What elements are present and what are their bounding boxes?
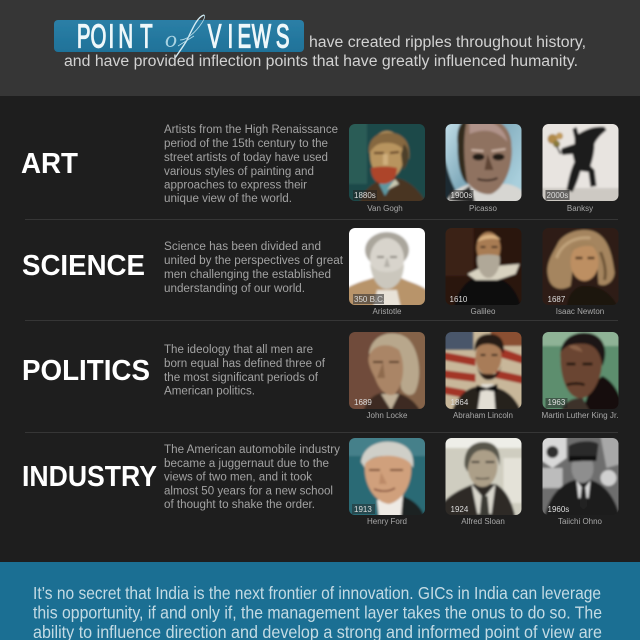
caption: Henry Ford: Henry Ford	[367, 517, 407, 526]
text block: Politics: born equal has defined three of	[164, 358, 326, 370]
portrait: Picasso: 1900s	[450, 191, 472, 200]
title banner: Point of Views: VIEWS	[208, 17, 290, 55]
header sentence: have created ripples throughout history,	[309, 34, 586, 51]
portrait: Henry Ford: 1913	[354, 505, 372, 514]
portrait: Van Gogh: 1880s	[354, 191, 376, 200]
text block: Industry: became a juggernaut due to the	[164, 458, 329, 470]
date tag	[352, 504, 375, 514]
text block: Art: period of the 15th century to the	[164, 138, 328, 150]
main dark panel	[0, 96, 640, 562]
text block: Industry: views of two men, and it took	[164, 472, 312, 484]
caption: John Locke: John Locke	[367, 411, 408, 420]
heading: Politics: POLITICS	[22, 355, 150, 387]
panel: closing statement	[0, 562, 640, 640]
portrait: Martin Luther King Jr.: 1963	[548, 398, 566, 407]
text block: Art: street artists of today have used	[164, 152, 328, 164]
portrait: Taiichi Ohno	[542, 438, 618, 514]
caption: Galileo: Galileo	[471, 307, 496, 316]
date tag: 1864	[450, 398, 469, 407]
row: Politics	[22, 344, 326, 398]
caption: Isaac Newton: Isaac Newton	[556, 307, 604, 316]
row: Art	[21, 124, 338, 205]
portrait: Picasso	[446, 124, 522, 201]
text block: Science: united by the perspectives of great	[164, 255, 344, 267]
portrait: Martin Luther King Jr.	[542, 332, 618, 409]
date tag: 1610	[450, 295, 468, 304]
portrait: Galileo	[446, 228, 522, 305]
text block: Industry: The American automobile industry	[164, 444, 340, 456]
portrait: Henry Ford	[349, 438, 425, 515]
portrait: Aristotle: 350 B.C.	[354, 295, 385, 304]
portrait: Van Gogh	[349, 124, 425, 201]
text block: Science: understanding of our world.	[164, 283, 305, 295]
caption: Taiichi Ohno: Taiichi Ohno	[558, 517, 603, 526]
row dividers	[25, 220, 618, 432]
date tag: 1960s	[548, 505, 569, 514]
date tag	[546, 398, 568, 408]
heading: Industry: INDUSTRY	[22, 461, 157, 493]
date tag: 1687	[548, 295, 566, 304]
title banner: Point of Views: o	[165, 27, 177, 53]
heading: Science: SCIENCE	[22, 250, 145, 282]
text block: Industry: of thought to shake the order.	[164, 499, 315, 511]
header sentence: and have provided inflection points that have greatly influenced humanity.	[64, 53, 578, 70]
title banner: Point of Views: POINT	[77, 17, 153, 55]
text block: Science: Science has been divided and	[164, 241, 321, 253]
closing text	[33, 583, 602, 640]
date tag: 1924	[450, 505, 469, 514]
text block: Science: men challenging the established	[164, 269, 331, 281]
text block: Industry: almost 50 years for a new school	[164, 486, 333, 498]
portrait: Isaac Newton	[542, 228, 618, 305]
row: Science	[22, 241, 344, 295]
text block: Politics: the most significant periods of	[164, 372, 319, 384]
caption: Aristotle: Aristotle	[373, 307, 402, 316]
caption: Banksy: Banksy	[567, 204, 593, 213]
title banner: Point of Views	[54, 15, 304, 58]
portrait: Banksy	[540, 122, 620, 203]
portrait: Aristotle	[349, 228, 425, 305]
row: Industry	[22, 444, 340, 511]
portrait: Abraham Lincoln	[446, 332, 522, 409]
caption: Alfred Sloan: Alfred Sloan	[461, 517, 505, 526]
header sentence	[64, 34, 586, 70]
date tag: 1689	[354, 398, 372, 407]
text block: Art: Artists from the High Renaissance	[164, 124, 338, 136]
text block: Politics	[164, 344, 326, 398]
heading: Art: ART	[21, 148, 79, 180]
date tag	[353, 190, 377, 200]
caption: Martin Luther King Jr.: Martin Luther King Jr.	[542, 411, 618, 420]
text block: Art: approaches to express their	[164, 180, 307, 192]
text block: Art	[164, 124, 338, 205]
portrait: Banksy: 2000s	[546, 191, 568, 200]
text block: Science	[164, 241, 344, 295]
text block: Art: unique view of the world.	[164, 193, 292, 205]
text block: Art: various styles of painting and	[164, 166, 314, 178]
text block: Politics: American politics.	[164, 386, 255, 398]
date tag	[546, 190, 570, 200]
date tag	[353, 294, 384, 304]
closing text: this opportunity, if and only if, the management layer takes the onus to do so. The	[33, 602, 602, 622]
text block: Industry	[164, 444, 340, 511]
caption: Abraham Lincoln: Abraham Lincoln	[453, 411, 513, 420]
caption: Picasso: Picasso	[469, 204, 498, 213]
caption: Van Gogh: Van Gogh	[367, 204, 403, 213]
text block: Politics: The ideology that all men are	[164, 344, 313, 356]
portrait: Alfred Sloan	[446, 438, 522, 515]
header band	[0, 0, 640, 96]
date tag	[450, 190, 474, 200]
portrait: John Locke	[349, 332, 425, 409]
